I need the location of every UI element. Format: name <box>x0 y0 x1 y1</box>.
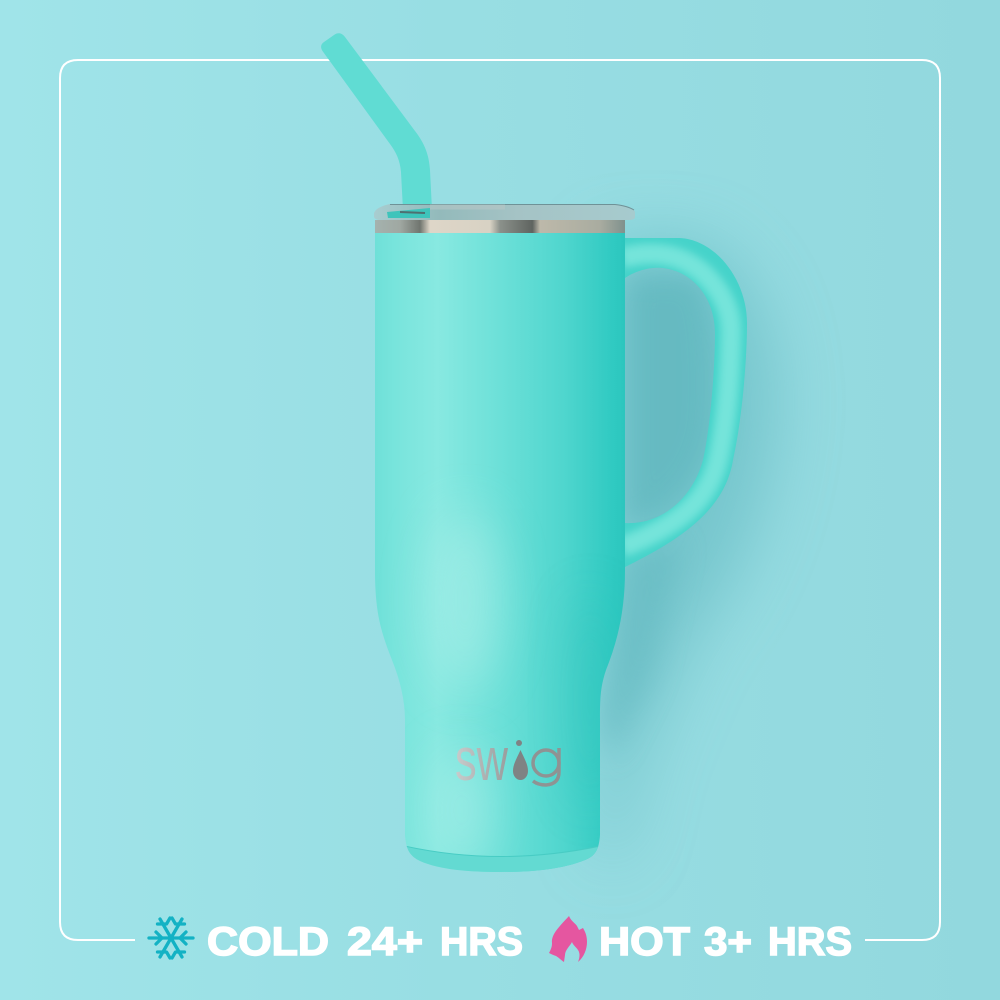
steel rim <box>375 220 625 233</box>
mug shadow <box>600 240 776 860</box>
straw <box>321 33 432 210</box>
clear lid <box>374 204 635 220</box>
base ring <box>407 847 598 872</box>
label: cold 24+ hrs: HRS <box>440 920 523 964</box>
logo letter g <box>533 748 559 785</box>
label: cold 24+ hrs <box>207 920 523 964</box>
swig logo: sw <box>455 726 508 793</box>
mug handle <box>620 238 747 568</box>
label: cold 24+ hrs: COLD <box>207 920 329 964</box>
icon: snowflake <box>149 918 193 958</box>
white rounded frame <box>60 60 940 940</box>
logo droplet i <box>513 740 528 780</box>
label: hot 3+ hrs: HOT <box>599 920 690 964</box>
label: cold 24+ hrs: 24+ <box>347 920 423 964</box>
mug body <box>375 232 625 880</box>
label: hot 3+ hrs: HRS <box>768 920 852 964</box>
label: hot 3+ hrs <box>599 920 852 964</box>
label: hot 3+ hrs: 3+ <box>704 920 752 964</box>
icon: flame <box>549 916 587 962</box>
